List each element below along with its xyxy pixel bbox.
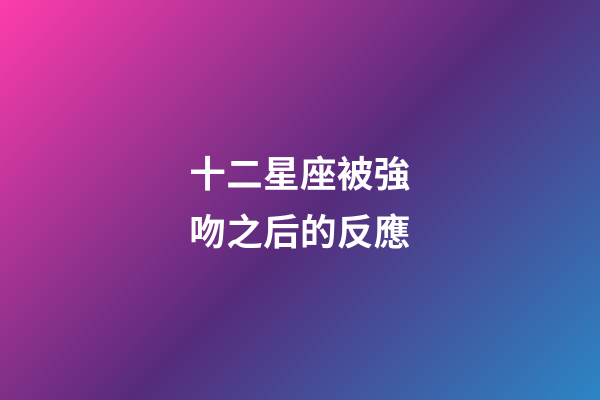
title: 吻之后的反應 — [189, 212, 411, 253]
title — [189, 154, 411, 253]
title: 十二星座被強 — [189, 154, 411, 195]
